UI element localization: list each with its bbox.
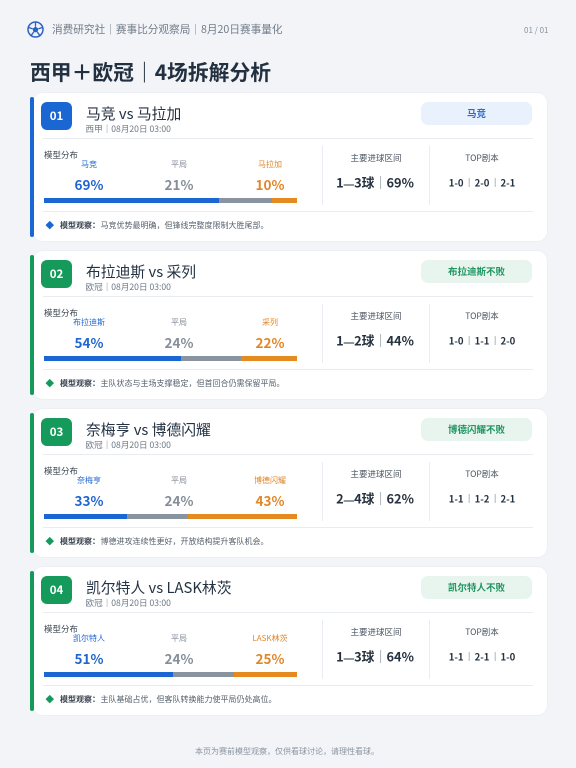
title: 西甲＋欧冠｜4场拆解分析 [30,56,271,86]
brand text: 消费研究社｜赛事比分观察局｜8月20日赛事量化 [52,22,283,37]
model distribution label: 模型分布 [44,306,78,318]
verdict pill: 凯尔特人不败 [448,580,505,594]
home percentage: 51% [75,648,103,668]
top scores: 1-1 1-2 2-1 [449,491,515,505]
match title: 马竞 vs 马拉加 [86,103,181,124]
panel: match 02 [30,251,547,399]
top scores: 1-0 1-1 2-0 [449,333,515,347]
model distribution label: 模型分布 [44,622,78,634]
away label: LASK林茨 [252,633,288,644]
top scores heading: TOP剧本 [465,468,499,480]
icon: diamond [46,537,54,544]
home percentage: 54% [75,332,103,352]
header: brand line [27,21,283,38]
model distribution label: 模型分布 [44,464,78,476]
top scores: 1-1 2-1 1-0 [449,649,515,663]
draw label: 平局 [171,633,187,644]
probability bar [44,198,297,203]
probability bar [44,672,297,677]
goal range heading: 主要进球区间 [350,468,402,480]
draw percentage: 24% [165,490,193,510]
goal range heading: 主要进球区间 [350,626,402,638]
panel: match 03 [30,409,547,557]
panel: match 01 [30,93,547,241]
away percentage: 43% [256,490,284,510]
match title: 奈梅亨 vs 博德闪耀 [86,419,211,440]
match meta: 欧冠｜08月20日 03:00 [86,438,171,450]
probability bar [44,356,297,361]
icon: diamond [46,695,54,702]
match meta: 欧冠｜08月20日 03:00 [86,596,171,608]
goal range value: 1—3球 69% [336,173,414,192]
draw percentage: 21% [165,174,193,194]
top scores: 1-0 2-0 2-1 [449,175,515,189]
match number: 04 [50,582,63,598]
home label: 奈梅亨 [77,475,101,486]
away label: 马拉加 [258,159,282,170]
draw percentage: 24% [165,332,193,352]
verdict pill: 博德闪耀不败 [448,422,505,436]
icon: football logo [27,21,44,38]
panel: match 04 [30,567,547,715]
match number: 01 [50,108,63,124]
home label: 凯尔特人 [73,633,105,644]
goal range value: 2—4球 62% [336,489,414,508]
away percentage: 22% [256,332,284,352]
match meta: 西甲｜08月20日 03:00 [86,122,171,134]
goal range value: 1—3球 64% [336,647,414,666]
draw percentage: 24% [165,648,193,668]
model note: 模型观察：博德进攻连续性更好，开放结构提升客队机会。 [60,536,268,546]
verdict pill [421,260,532,283]
footer disclaimer: 本页为赛前模型观察，仅供看球讨论，请理性看球。 [195,746,379,756]
match number: 02 [50,266,63,282]
verdict pill [421,576,532,599]
match number [41,418,72,446]
home label: 马竞 [81,159,97,170]
away label: 采列 [262,317,278,328]
draw label: 平局 [171,159,187,170]
icon: diamond [46,221,54,228]
top scores heading: TOP剧本 [465,310,499,322]
top scores heading: TOP剧本 [465,152,499,164]
home percentage: 33% [75,490,103,510]
model distribution label: 模型分布 [44,148,78,160]
away label: 博德闪耀 [254,475,286,486]
verdict pill [421,102,532,125]
away percentage: 25% [256,648,284,668]
model note: 模型观察：马竞优势最明确，但锋线完整度限制大胜尾部。 [60,220,268,230]
goal range heading: 主要进球区间 [350,152,402,164]
away percentage: 10% [256,174,284,194]
home label: 布拉迪斯 [73,317,105,328]
verdict pill: 布拉迪斯不败 [448,264,505,278]
page number: 01 / 01 [524,25,548,36]
match title: 凯尔特人 vs LASK林茨 [86,577,232,598]
match meta: 欧冠｜08月20日 03:00 [86,280,171,292]
top scores heading: TOP剧本 [465,626,499,638]
goal range value: 1—2球 44% [336,331,414,350]
model note: 模型观察：主队状态与主场支撑稳定，但首回合仍需保留平局。 [60,378,284,388]
match title: 布拉迪斯 vs 采列 [86,261,196,282]
icon: diamond [46,379,54,386]
match number [41,102,72,130]
verdict pill: 马竞 [467,106,486,120]
model note: 模型观察：主队基础占优，但客队转换能力使平局仍处高位。 [60,694,276,704]
goal range heading: 主要进球区间 [350,310,402,322]
verdict pill [421,418,532,441]
home percentage: 69% [75,174,103,194]
match number [41,260,72,288]
draw label: 平局 [171,317,187,328]
draw label: 平局 [171,475,187,486]
match number [41,576,72,604]
match number: 03 [50,424,63,440]
probability bar [44,514,297,519]
